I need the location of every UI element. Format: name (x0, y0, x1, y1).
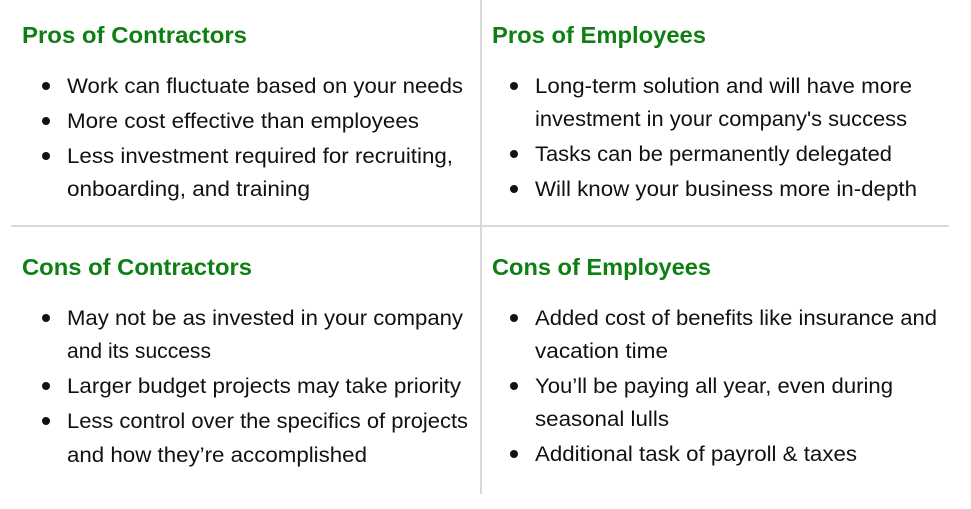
list: pros of contractors (42, 74, 463, 201)
panel: cons of employees (492, 254, 937, 466)
heading: pros of employees: Pros of Employees (492, 22, 706, 48)
list: pros of contractors: More cost effective than employees (67, 109, 419, 133)
list: cons of employees (510, 306, 937, 466)
list: cons of employees: vacation time (535, 339, 668, 363)
list: pros of employees: Long-term solution and will have more (535, 74, 912, 98)
list: pros of employees: Will know your business more in-depth (535, 177, 917, 201)
list: cons of contractors: Less control over the specifics of projects (67, 409, 468, 433)
list: pros of employees: investment in your company's success (535, 107, 907, 131)
list: cons of contractors: and its success (67, 339, 211, 363)
list: cons of contractors: and how they’re accomplished (67, 443, 367, 467)
list: cons of employees: seasonal lulls (535, 407, 669, 431)
heading: cons of contractors: Cons of Contractors (22, 254, 252, 280)
heading: pros of contractors: Pros of Contractors (22, 22, 247, 48)
list: cons of employees: You’ll be paying all year, even during (535, 374, 893, 398)
list: pros of employees: Tasks can be permanently delegated (535, 142, 892, 166)
list: pros of contractors: onboarding, and training (67, 177, 310, 201)
list: pros of contractors: Less investment required for recruiting, (67, 144, 453, 168)
panel: cons of contractors (22, 254, 468, 467)
list: cons of employees: Added cost of benefits like insurance and (535, 306, 937, 330)
panel: pros of employees (492, 22, 917, 201)
list: cons of contractors: Larger budget projects may take priority (67, 374, 461, 398)
list: pros of employees (510, 74, 917, 201)
list: cons of contractors: May not be as invested in your company (67, 306, 463, 330)
heading: cons of employees: Cons of Employees (492, 254, 711, 280)
list: pros of contractors: Work can fluctuate based on your needs (67, 74, 463, 98)
list: cons of employees: Additional task of payroll & taxes (535, 442, 857, 466)
panel: pros of contractors (22, 22, 463, 201)
list: cons of contractors (42, 306, 468, 467)
